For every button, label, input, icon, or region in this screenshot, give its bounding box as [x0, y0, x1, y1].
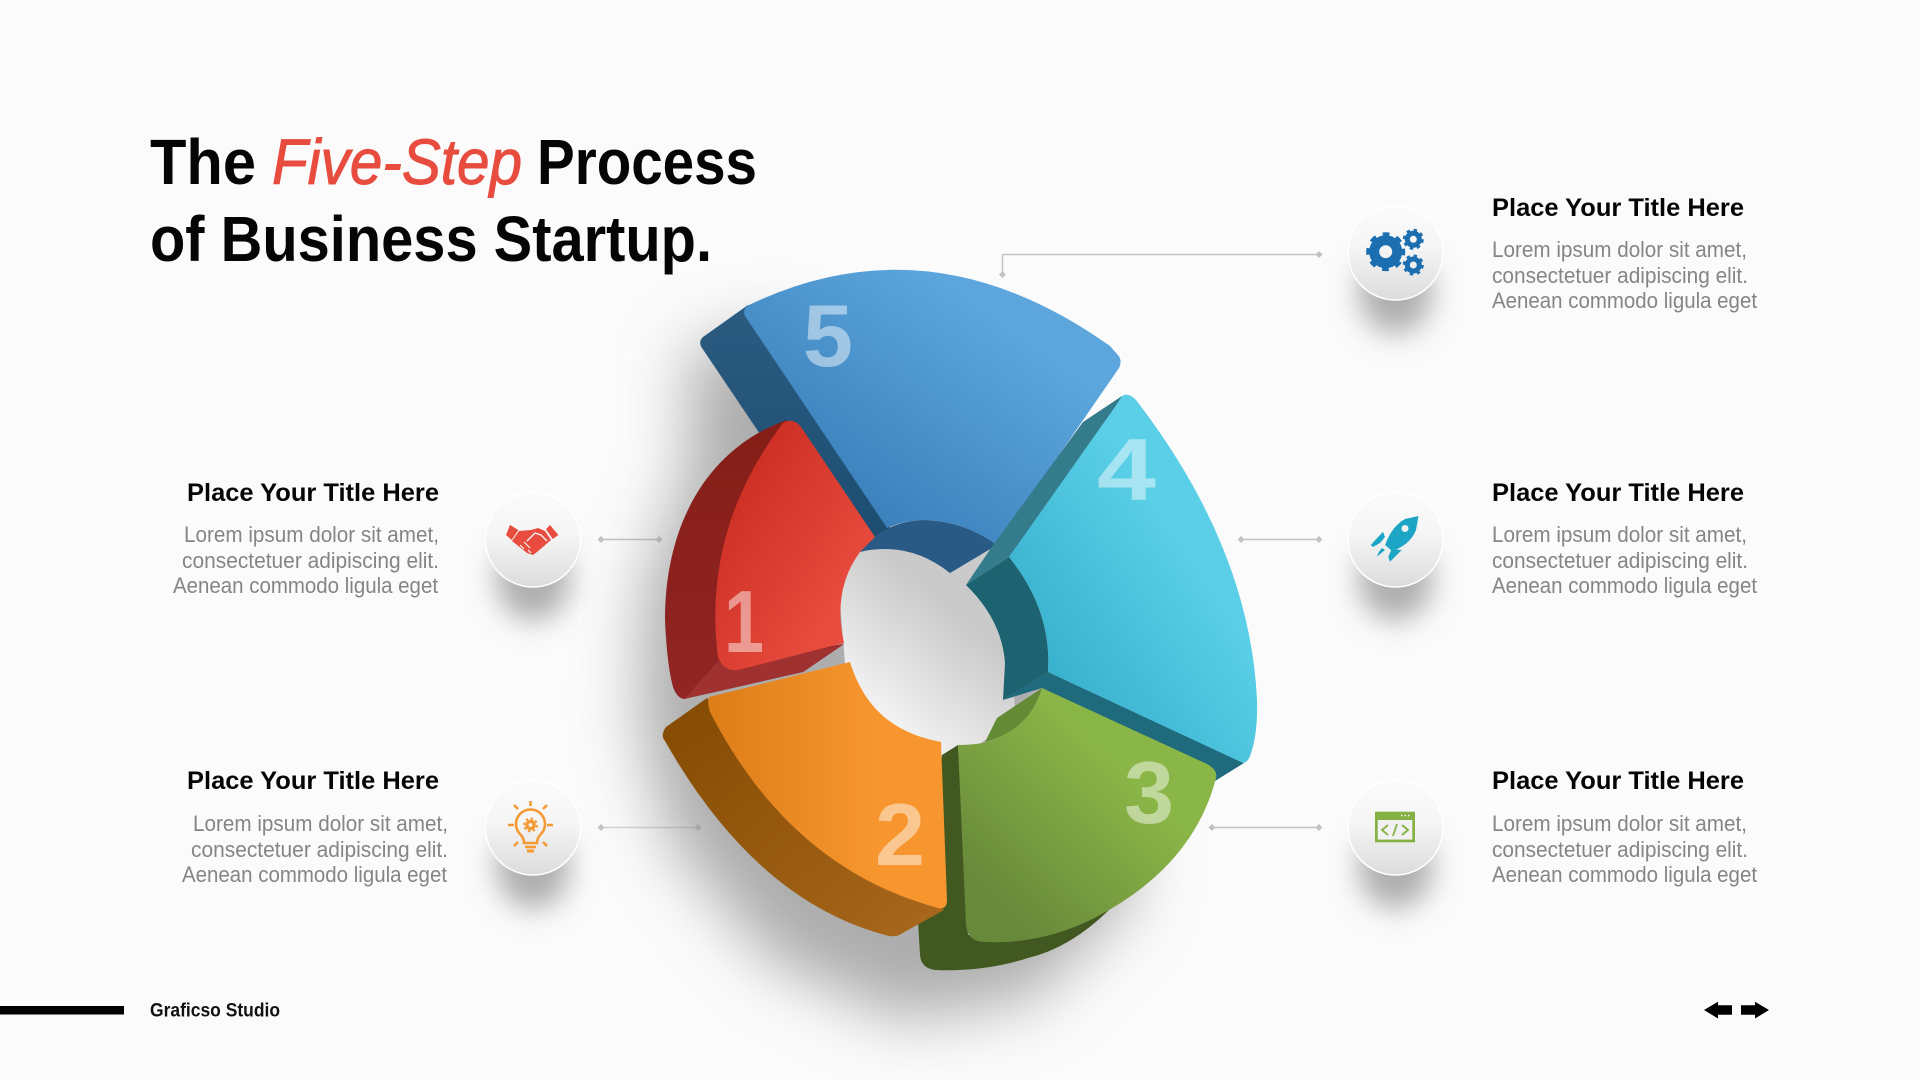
- card: gears: [1348, 205, 1443, 334]
- connector lines: [598, 251, 1322, 831]
- center hole: [835, 540, 1015, 765]
- text block: bottom right: Place Your Title Here: [1492, 767, 1744, 795]
- step numbers: 2: [875, 785, 925, 884]
- step 3 segment: [918, 688, 1216, 970]
- icon: code window: [1375, 812, 1415, 842]
- title: [150, 126, 757, 275]
- text block: top right: consectetuer adipiscing elit.: [1492, 263, 1748, 288]
- step 2 segment: [663, 662, 947, 936]
- text block: middle right: Lorem ipsum dolor sit amet,: [1492, 522, 1747, 547]
- text block: bottom left: Aenean commodo ligula eget: [182, 862, 447, 887]
- step 4 segment: [966, 395, 1257, 781]
- card: code window: [1348, 780, 1443, 909]
- navigation arrows: [1704, 1002, 1769, 1018]
- card: light bulb: [486, 780, 580, 909]
- text block: bottom left: consectetuer adipiscing elit.: [191, 837, 448, 862]
- card: handshake: [486, 492, 580, 621]
- text block: middle right: [1492, 479, 1757, 598]
- text block: bottom right: Lorem ipsum dolor sit amet,: [1492, 811, 1747, 836]
- text block: middle left: Aenean commodo ligula eget: [173, 573, 438, 598]
- card: rocket: [1348, 492, 1443, 621]
- text block: bottom left: [182, 767, 448, 887]
- icon: rocket: [1371, 516, 1418, 562]
- text block: bottom left: Place Your Title Here: [187, 767, 439, 795]
- text block: middle left: [173, 479, 439, 598]
- icon: gears: [1369, 230, 1422, 274]
- text block: middle left: Lorem ipsum dolor sit amet,: [184, 522, 439, 547]
- footer bar: [0, 1006, 124, 1014]
- text block: middle right: Place Your Title Here: [1492, 479, 1744, 507]
- icon: handshake: [506, 525, 558, 555]
- step 1 segment: [665, 420, 875, 699]
- step numbers: 1: [724, 572, 764, 671]
- text block: middle left: consectetuer adipiscing elit.: [182, 548, 439, 573]
- text block: top right: Aenean commodo ligula eget: [1492, 288, 1757, 313]
- title: The: [150, 126, 256, 198]
- text block: top right: [1492, 194, 1757, 313]
- step numbers: [724, 286, 1174, 884]
- text block: middle right: consectetuer adipiscing elit.: [1492, 548, 1748, 573]
- text block: top right: Lorem ipsum dolor sit amet,: [1492, 237, 1747, 262]
- text block: bottom right: consectetuer adipiscing elit.: [1492, 837, 1748, 862]
- step numbers: 5: [803, 286, 853, 385]
- title: Five-Step: [272, 126, 522, 198]
- text block: middle right: Aenean commodo ligula eget: [1492, 573, 1757, 598]
- icon: light bulb: [508, 801, 553, 851]
- chart drop shadow: [640, 330, 1130, 1020]
- text block: bottom right: Aenean commodo ligula eget: [1492, 862, 1757, 887]
- title: Process: [537, 126, 757, 198]
- footer label: Graficso Studio: [150, 1000, 280, 1022]
- text block: bottom left: Lorem ipsum dolor sit amet,: [193, 811, 448, 836]
- text block: middle left: Place Your Title Here: [187, 479, 439, 507]
- step 5 segment: [700, 270, 1121, 573]
- step numbers: 4: [1097, 420, 1156, 519]
- title: of Business Startup.: [150, 203, 712, 275]
- step numbers: 3: [1124, 743, 1174, 842]
- text block: top right: Place Your Title Here: [1492, 194, 1744, 222]
- text block: bottom right: [1492, 767, 1757, 887]
